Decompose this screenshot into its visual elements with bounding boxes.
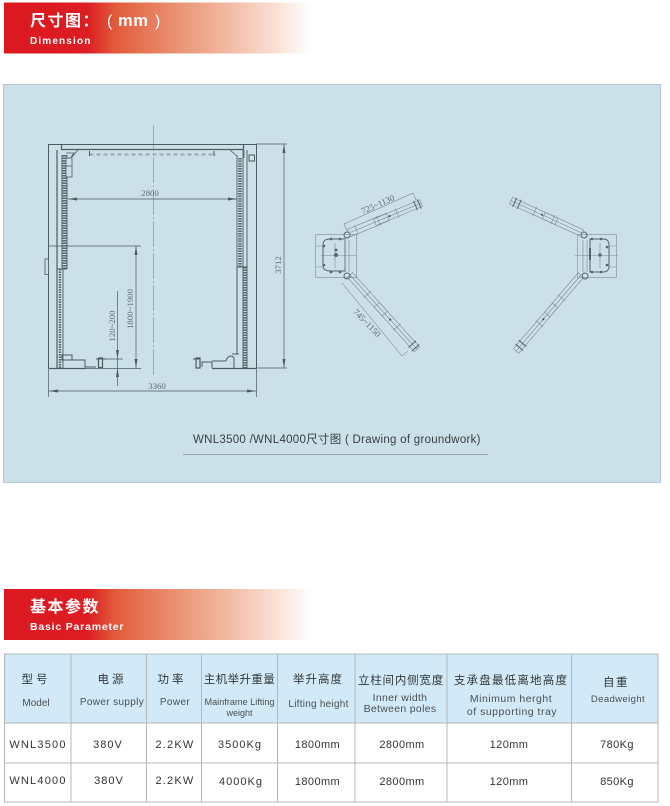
table: basic parameters xyxy=(4,654,658,802)
table header background xyxy=(4,654,658,723)
caption: drawing of groundwork: WNL3500 /WNL4000尺寸图 ( Drawing of groundwork) xyxy=(193,432,481,446)
table row: WNL4000: 2.2KW xyxy=(155,775,195,787)
upper arm xyxy=(509,196,584,238)
arm labels: 725~1130 xyxy=(360,192,396,216)
table row: WNL3500: WNL3500 xyxy=(9,739,67,751)
dimension 120-200 xyxy=(105,291,123,386)
base line xyxy=(48,368,256,370)
base plate xyxy=(578,234,616,278)
table row: WNL3500: 120mm xyxy=(490,739,528,751)
left post xyxy=(56,150,58,368)
right lifting arm xyxy=(202,354,239,368)
dimension labels: 120~200 xyxy=(107,310,117,342)
table row: WNL4000: WNL4000 xyxy=(9,775,67,787)
top beam xyxy=(90,154,216,156)
chart: lift front elevation xyxy=(45,125,287,397)
table row: WNL3500 xyxy=(9,739,634,751)
table header text xyxy=(22,672,629,689)
left lifting arm xyxy=(62,355,96,367)
table: basic parameters: Power supply xyxy=(80,697,144,708)
frame xyxy=(48,144,256,368)
chart: left arm plan view: 745~1150 xyxy=(351,307,383,339)
table row: WNL4000: 2800mm xyxy=(379,776,425,788)
table row: WNL4000: 380V xyxy=(94,775,124,787)
lower arm xyxy=(346,272,421,353)
panel: drawing of groundwork xyxy=(4,84,660,482)
table: basic parameters: weight xyxy=(225,708,253,718)
table: basic parameters: Mainframe Lifting xyxy=(204,697,274,708)
heading: dimension subtitle: Dimension xyxy=(30,36,91,47)
banner: Dimension xyxy=(4,2,312,54)
dimension 3360 xyxy=(48,369,256,397)
heading: parameter title: 基本参数 xyxy=(30,597,100,616)
upper arm xyxy=(347,199,423,238)
table row: WNL4000: 4000Kg xyxy=(219,776,263,788)
table row: WNL3500: 2800mm xyxy=(379,739,425,751)
table: basic parameters: Lifting height xyxy=(288,699,349,710)
table row: WNL3500: 2.2KW xyxy=(155,739,195,751)
table row: WNL3500: 380V xyxy=(93,739,123,751)
table header text: 电源 xyxy=(98,672,126,686)
table: basic parameters: Model xyxy=(22,698,50,709)
arm dimension lines xyxy=(344,193,416,231)
chart: left arm plan view xyxy=(316,192,423,356)
dimension 1800-1900 xyxy=(49,246,141,368)
table row: WNL4000: 850Kg xyxy=(600,776,634,788)
dimension labels: 1800~1900 xyxy=(125,288,135,329)
table grid xyxy=(4,654,658,802)
table header text: 型号 xyxy=(22,672,50,686)
base plate xyxy=(316,234,356,278)
table row: WNL4000: 1800mm xyxy=(295,776,340,788)
table header text: 主机举升重量 xyxy=(204,672,275,686)
table: basic parameters: of supporting tray xyxy=(467,706,557,718)
table: basic parameters: Inner width xyxy=(373,692,427,704)
table header text: 功率 xyxy=(158,672,186,686)
table row: WNL4000 xyxy=(9,775,634,788)
dimension labels: 3360 xyxy=(148,381,166,391)
lower arm xyxy=(512,272,585,354)
table header text: 立柱间内侧宽度 xyxy=(358,673,444,687)
heading: dimension title: ) xyxy=(155,13,162,30)
table row: WNL3500: 780Kg xyxy=(600,739,634,751)
chart: right arm plan view xyxy=(509,196,618,354)
right post xyxy=(237,150,247,368)
heading: dimension title: ( xyxy=(107,13,114,30)
dimension 3712 xyxy=(256,144,287,368)
dimension 2800 xyxy=(68,198,237,200)
table header text: 举升高度 xyxy=(293,672,343,686)
table header text: 支承盘最低离地高度 xyxy=(454,673,568,687)
table: basic parameters: Power xyxy=(160,697,190,708)
heading: dimension title: 尺寸图： xyxy=(30,13,100,30)
table: basic parameters: Between poles xyxy=(364,703,436,715)
table: basic parameters: Minimum herght xyxy=(470,693,552,705)
dimension labels: 3712 xyxy=(273,256,283,274)
dimension labels xyxy=(107,188,283,391)
heading: parameter subtitle: Basic Parameter xyxy=(30,621,124,633)
heading: dimension title: mm xyxy=(118,12,149,30)
table row: WNL3500: 1800mm xyxy=(295,739,340,751)
dimension labels: 2800 xyxy=(141,188,159,198)
banner: Basic Parameter xyxy=(4,589,312,640)
table row: WNL4000: 120mm xyxy=(490,776,528,788)
centre line xyxy=(152,125,154,376)
table row: WNL3500: 3500Kg xyxy=(218,739,262,751)
table header text: 自重 xyxy=(603,675,629,689)
table: basic parameters: Deadweight xyxy=(591,694,645,705)
